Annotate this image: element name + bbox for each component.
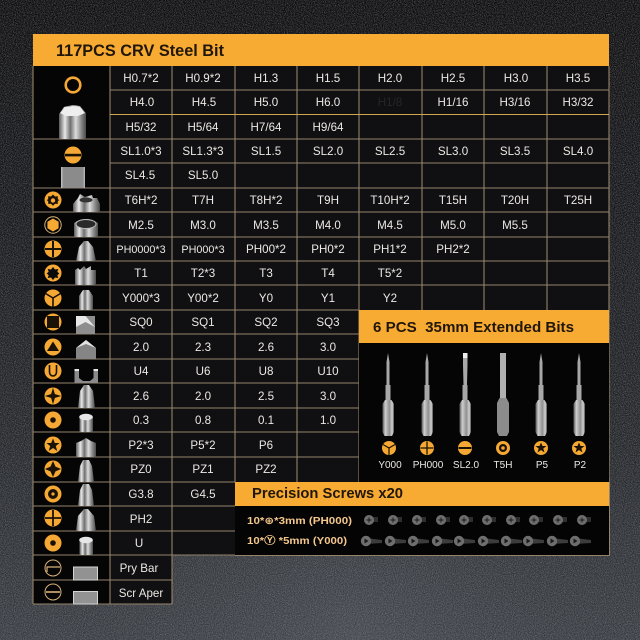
- slotted bit sizes: SL2.5: [375, 145, 405, 158]
- PH row: PH1*2: [373, 243, 407, 256]
- triangle row: [133, 341, 336, 354]
- U bit: icon and image: [44, 362, 98, 383]
- T6H row: T20H: [501, 194, 529, 207]
- P row: P5*2: [190, 439, 216, 452]
- extended bits banner: [359, 310, 609, 343]
- T row: T2*3: [191, 267, 215, 280]
- SQ row: SQ3: [316, 316, 340, 329]
- hex bit sizes: H5/32: [126, 121, 156, 134]
- hex bit sizes: H1/8: [378, 96, 402, 109]
- U row: [134, 365, 339, 378]
- Y row: Y00*2: [187, 292, 219, 305]
- SQ row: SQ2: [254, 316, 278, 329]
- row of Y000 screws: [361, 536, 591, 546]
- slotted bit sizes: SL1.3*3: [182, 145, 224, 158]
- Y row: Y0: [259, 292, 273, 305]
- T6H row: T7H: [192, 194, 214, 207]
- title banner: 117PCS CRV Steel Bit: 117PCS CRV Steel Bit: [56, 42, 224, 60]
- triangle row: 2.6: [258, 341, 274, 354]
- pozidriv bit: icon and image: [44, 460, 94, 482]
- round row: 1.0: [320, 414, 336, 427]
- T row: T1: [134, 267, 148, 280]
- PZ row: PZ1: [192, 463, 214, 476]
- extended bit P5: P5: [536, 460, 549, 471]
- P row: P2*3: [128, 439, 154, 452]
- T6H row: T8H*2: [250, 194, 282, 207]
- T6H row: T25H: [564, 194, 592, 207]
- triangle row: 2.3: [195, 341, 211, 354]
- M row: M4.5: [377, 219, 403, 232]
- T6H row: T9H: [317, 194, 339, 207]
- PZ row: PZ0: [130, 463, 152, 476]
- U label: U: [135, 537, 143, 550]
- extended bit T5H: [494, 353, 512, 471]
- round row: 0.1: [258, 414, 274, 427]
- PZ row: [130, 463, 277, 476]
- P row: P6: [259, 439, 273, 452]
- T row: T4: [321, 267, 335, 280]
- precision screws banner: Precision Screws x20: [252, 486, 403, 502]
- hex bit sizes: H0.9*2: [185, 72, 221, 85]
- G row: G4.5: [190, 488, 216, 501]
- T6H row: [125, 194, 592, 207]
- phillips bit: icon and image: [44, 240, 96, 261]
- slotted bit sizes: SL3.0: [438, 145, 468, 158]
- slotted bit sizes: SL4.5: [125, 169, 155, 182]
- T6H bit: icon and image: [44, 192, 100, 212]
- M row: M5.0: [440, 219, 466, 232]
- cross bit: icon and image: [44, 385, 95, 408]
- round row: 0.8: [195, 414, 211, 427]
- T row: [134, 267, 402, 280]
- M row: M4.0: [315, 219, 341, 232]
- U round bit: icon and image: [44, 534, 93, 555]
- metric socket bit: icon and image: [45, 217, 98, 237]
- slotted bit sizes: SL5.0: [188, 169, 218, 182]
- PH row: PH0000*3: [116, 244, 166, 256]
- tri-wing bit: icon and image: [44, 290, 93, 310]
- G row: [128, 488, 216, 501]
- U row: U4: [134, 365, 149, 378]
- M row: M3.0: [190, 219, 216, 232]
- slotted bit sizes: SL4.0: [563, 145, 593, 158]
- panel: precision screws: [235, 482, 610, 556]
- U row: U6: [196, 365, 210, 378]
- extended bit PH000: [413, 353, 444, 471]
- precision screws banner: [235, 482, 609, 506]
- T6H row: T15H: [439, 194, 467, 207]
- hex bit sizes: H4.0: [130, 96, 154, 109]
- slotted bit sizes: SL3.5: [500, 145, 530, 158]
- Y row: Y1: [321, 292, 335, 305]
- U row: U8: [259, 365, 273, 378]
- hex bit sizes: H1.3: [254, 72, 278, 85]
- row of PH000 screws: [364, 515, 591, 525]
- extended bit Y000: Y000: [378, 460, 402, 471]
- cross row: [133, 390, 336, 403]
- torx bit: icon and image: [44, 264, 96, 285]
- scraper: icon and image: [45, 584, 98, 604]
- T row: T5*2: [378, 267, 402, 280]
- Y row: Y000*3: [122, 292, 160, 305]
- round bit: icon and image: [44, 412, 93, 432]
- PZ row: PZ2: [255, 463, 277, 476]
- M row: M2.5: [128, 219, 154, 232]
- title banner: 117PCS CRV Steel Bit: [33, 34, 609, 66]
- extended bit SL2.0: SL2.0: [453, 460, 480, 471]
- hex bit sizes: H5/64: [188, 121, 219, 134]
- PH row: PH0*2: [311, 243, 345, 256]
- extended bit Y000: [378, 353, 402, 471]
- T row: T3: [259, 267, 273, 280]
- round row: [133, 414, 336, 427]
- T6H row: T6H*2: [125, 194, 157, 207]
- extended bit SL2.0: [453, 353, 480, 471]
- cross row: 2.5: [258, 390, 274, 403]
- pentalobe bit: icon and image: [44, 436, 96, 457]
- G bit: icon and image: [44, 484, 94, 506]
- hex bit sizes: H3/16: [500, 96, 530, 109]
- PH row: PH00*2: [246, 243, 286, 256]
- slotted bit sizes: SL2.0: [313, 145, 343, 158]
- hex bit sizes: H7/64: [251, 121, 282, 134]
- cross row: 2.6: [133, 390, 149, 403]
- U row: U10: [317, 365, 339, 378]
- hex bit sizes: H2.0: [378, 72, 402, 85]
- Y000 screw label: 10*Ⓨ *5mm (Y000): [247, 534, 347, 547]
- M row: [128, 219, 528, 232]
- SQ row: [129, 316, 340, 329]
- Y row: [122, 292, 397, 305]
- slotted bit sizes: SL1.0*3: [120, 145, 162, 158]
- extended bits banner: 6 PCS 35mm Extended Bits: [373, 319, 574, 336]
- hex bit sizes: H3/32: [563, 96, 593, 109]
- hex bit: icon and image: [59, 78, 86, 139]
- Y row: Y2: [383, 292, 397, 305]
- round row: 0.3: [133, 414, 149, 427]
- hex bit sizes: H1.5: [316, 72, 340, 85]
- panel: 6 PCS extended bits: [359, 310, 609, 482]
- hex bit sizes: H1/16: [438, 96, 468, 109]
- hex bit sizes: H2.5: [441, 72, 465, 85]
- PH row: [116, 243, 470, 256]
- triangle row: 2.0: [133, 341, 149, 354]
- G row: G3.8: [128, 488, 154, 501]
- pry bar label: Pry Bar: [120, 562, 158, 575]
- hex bit sizes: H5.0: [254, 96, 278, 109]
- pry bar: icon and image: [45, 560, 98, 580]
- triangle bit: icon and image: [44, 338, 96, 359]
- slotted bit: icon and image: [61, 146, 85, 188]
- slotted bit sizes: SL1.5: [251, 145, 281, 158]
- PH row: PH000*3: [181, 244, 225, 256]
- hex bit sizes: H4.5: [192, 96, 216, 109]
- grid lines: [33, 66, 609, 604]
- extended bit P2: P2: [574, 460, 587, 471]
- scraper label: Scr Aper: [119, 587, 163, 600]
- M row: M3.5: [253, 219, 279, 232]
- hex bit sizes: H3.5: [566, 72, 590, 85]
- cross row: 3.0: [320, 390, 336, 403]
- PH2 bit: icon and image: [44, 509, 96, 531]
- extended bit P2: [572, 353, 587, 471]
- hex bit sizes: [123, 72, 593, 134]
- table backing panels: [33, 66, 609, 604]
- hex bit sizes: H0.7*2: [123, 72, 159, 85]
- triangle row: 3.0: [320, 341, 336, 354]
- T6H row: T10H*2: [370, 194, 410, 207]
- SQ row: SQ1: [191, 316, 215, 329]
- M row: M5.5: [502, 219, 528, 232]
- PH2 label: PH2: [130, 513, 152, 526]
- P row: [128, 439, 273, 452]
- SQ row: SQ0: [129, 316, 153, 329]
- cross row: 2.0: [195, 390, 211, 403]
- extended bit PH000: PH000: [413, 460, 444, 471]
- PH000 screw label: 10*⊕*3mm (PH000): [247, 516, 352, 527]
- extended bit T5H: T5H: [494, 460, 512, 471]
- hex bit sizes: H3.0: [504, 72, 528, 85]
- hex bit sizes: H6.0: [316, 96, 340, 109]
- PH row: PH2*2: [436, 243, 470, 256]
- square bit: icon and image: [44, 314, 95, 334]
- extended bit P5: [534, 353, 549, 471]
- hex bit sizes: H9/64: [313, 121, 344, 134]
- slotted bit sizes: [120, 145, 593, 182]
